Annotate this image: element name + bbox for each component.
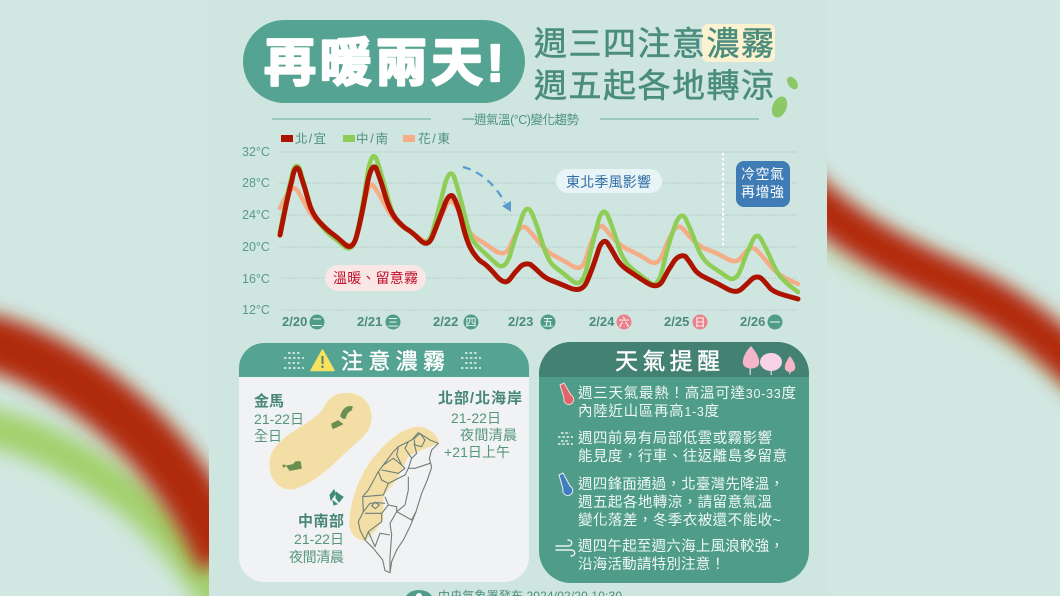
callout: northeast monsoon: 東北季風影響 (566, 174, 651, 190)
reminder: wind and waves: 沿海活動請特別注意！ (578, 555, 725, 573)
line: north (280, 167, 798, 299)
text: Kinmen Matsu: 21-22日 (254, 411, 304, 427)
line: central south (280, 156, 798, 292)
reminder: fog Thursday (558, 429, 787, 465)
map: Taiwan fog zone (349, 427, 439, 541)
callout: northeast monsoon (556, 169, 662, 193)
callout: warm and fog (325, 265, 426, 291)
blurred background band: left (0, 338, 225, 596)
headline (534, 24, 775, 104)
map: islands (282, 407, 352, 505)
reminder: wind and waves: 週四午起至週六海上風浪較強， (578, 537, 784, 555)
reminder: hot Wednesday: 週三天氣最熱！高溫可達30-33度 (578, 385, 796, 402)
map: offshore fog zone (269, 393, 372, 489)
reminder: front passage (559, 473, 784, 529)
text: north coast: +21日上午 (444, 444, 510, 460)
reminder: front passage: 變化落差，冬季衣被還不能收~ (578, 511, 781, 529)
icon: fog left (284, 353, 304, 368)
poster panel (209, 0, 827, 596)
y axis labels (242, 145, 270, 317)
date labels: 四 (466, 317, 476, 329)
reminder: hot Wednesday: 內陸近山區再高1-3度 (578, 403, 719, 420)
blurred background band: right (827, 162, 1060, 404)
icon: pink trees (743, 346, 795, 375)
text: north coast: 夜間清晨 (460, 427, 517, 443)
title pill: 再暖兩天! (264, 35, 504, 93)
chart legend: 花/東 (418, 131, 450, 146)
date labels: 2/20 (282, 314, 307, 329)
date labels: 五 (542, 317, 554, 329)
reminder: front passage: 週五起各地轉涼，請留意氣溫 (578, 493, 772, 511)
date labels: 2/25 (664, 314, 689, 329)
chart subtitle: 一週氣溫(°C)變化趨勢 (462, 112, 579, 127)
text: central south: 中南部 (298, 512, 344, 530)
date labels: 2/21 (357, 314, 382, 329)
date labels: 2/22 (433, 314, 458, 329)
icon: leaves (769, 75, 800, 120)
date labels: 三 (388, 317, 398, 329)
headline: 週三四注意濃霧 (534, 25, 774, 62)
date labels: 一 (770, 317, 780, 329)
y axis labels: 24°C (242, 208, 270, 222)
y axis labels: 20°C (242, 240, 270, 254)
date labels: 二 (312, 317, 322, 329)
date labels: 2/26 (740, 314, 765, 329)
panel: fog warning (239, 343, 529, 582)
reminder: wind and waves (556, 537, 784, 573)
callout: cold air (723, 153, 790, 248)
chart legend: 北/宜 (295, 131, 326, 146)
text: central south (289, 512, 344, 565)
y axis labels: 32°C (242, 145, 270, 159)
y axis labels: 28°C (242, 176, 270, 190)
reminder: hot Wednesday (560, 383, 796, 420)
icon: warning triangle (311, 350, 334, 370)
reminder: fog Thursday: 週四前易有局部低雲或霧影響 (578, 429, 772, 447)
callout: cold air: 冷空氣 (741, 166, 784, 182)
title pill (243, 20, 525, 103)
text: Kinmen Matsu: 全日 (254, 428, 282, 444)
panel: weather reminders (539, 342, 809, 583)
date labels: 日 (694, 317, 706, 329)
y axis labels: 12°C (242, 303, 270, 317)
line: east (280, 185, 798, 284)
text: central south: 夜間清晨 (289, 549, 344, 565)
chart legend (281, 131, 450, 146)
arrow: dashed blue (463, 167, 511, 212)
temperature line chart (242, 145, 798, 317)
reminder: fog Thursday: 能見度，行車、往返離島多留意 (578, 447, 787, 465)
text: Kinmen Matsu (254, 392, 304, 444)
chart legend: 中/南 (356, 131, 388, 146)
fog heading: 注意濃霧 (341, 349, 445, 374)
reminder: front passage: 週四鋒面通過，北臺灣先降溫， (578, 476, 784, 493)
y axis labels: 16°C (242, 272, 270, 286)
map: Taiwan outline (358, 433, 438, 573)
date labels: 2/24 (589, 314, 615, 329)
date labels: 六 (618, 316, 630, 329)
callout: warm and fog: 溫暖、留意霧 (333, 270, 418, 286)
reminders heading: 天氣提醒 (615, 348, 720, 374)
text: north coast: 21-22日 (451, 410, 501, 426)
text: Kinmen Matsu: 金馬 (254, 392, 284, 410)
text: central south: 21-22日 (294, 531, 344, 547)
date labels: 2/23 (508, 314, 533, 329)
text: north coast: 北部/北海岸 (438, 389, 522, 407)
date labels (282, 314, 782, 330)
headline: 週五起各地轉涼 (534, 67, 774, 104)
callout: cold air: 再增強 (741, 184, 784, 200)
icon: fog right (461, 353, 481, 368)
text: north coast (438, 389, 522, 460)
